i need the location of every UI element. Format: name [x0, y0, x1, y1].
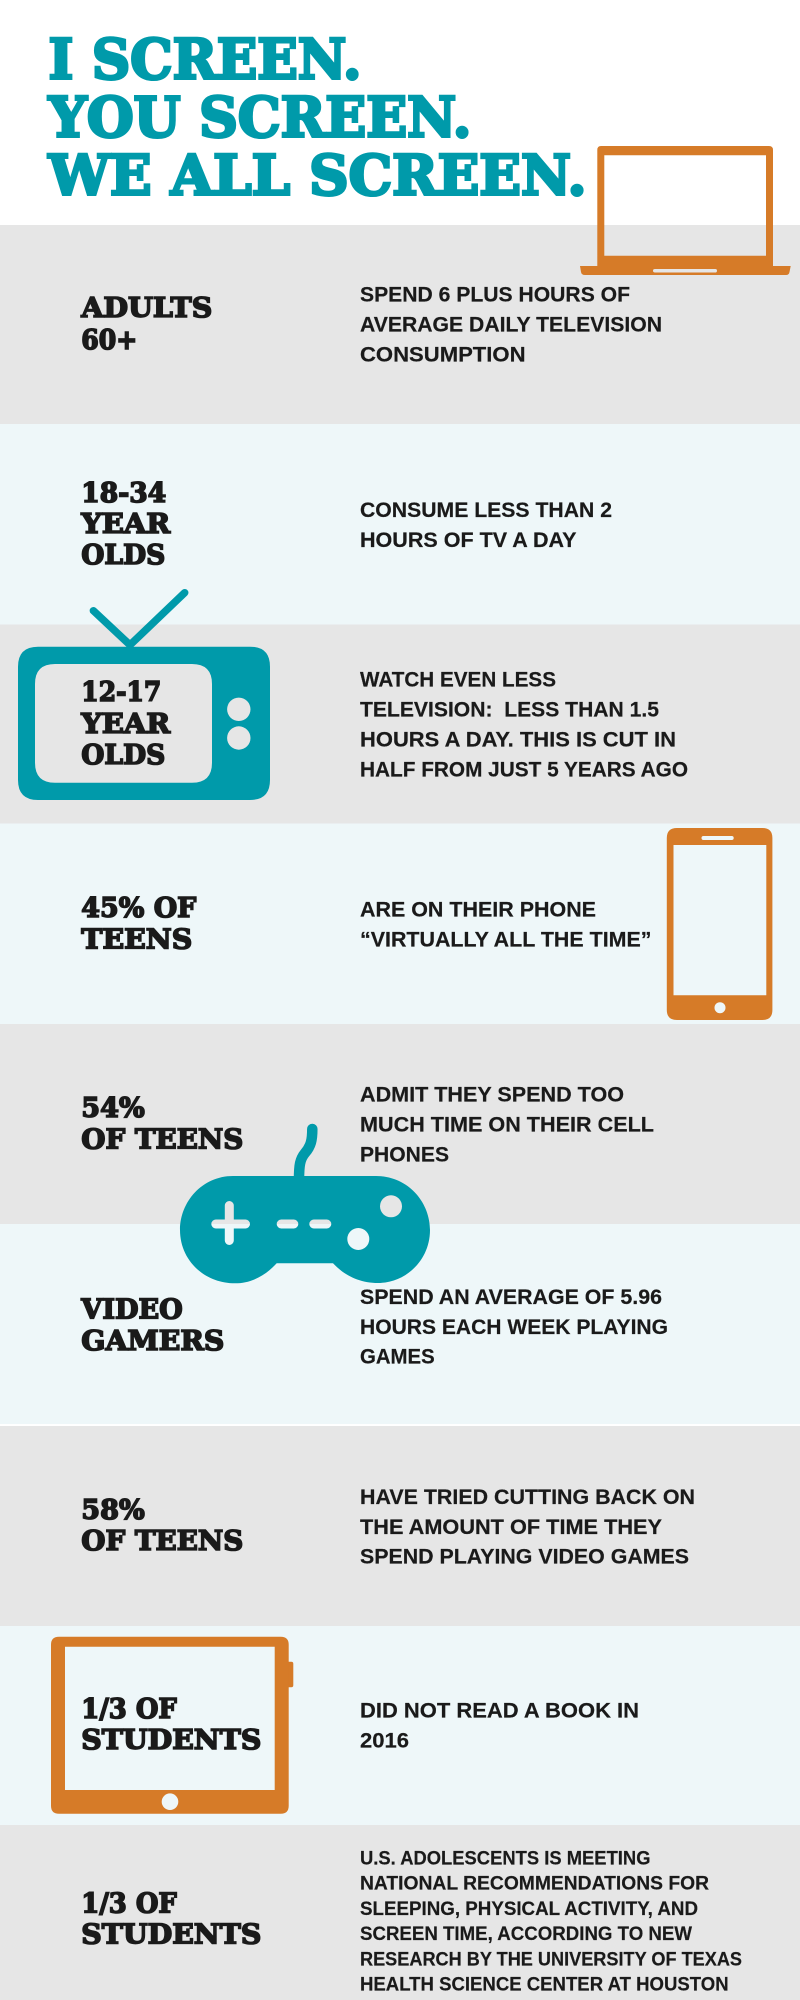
panel: adults 60+	[0, 225, 800, 424]
text: 18-34 stat	[360, 499, 612, 552]
text: recommendations stat: NATIONAL RECOMMENDATIONS FOR	[360, 1872, 709, 1894]
title: WE ALL SCREEN.	[48, 142, 587, 208]
text: books stat	[360, 1700, 639, 1753]
text: 54% stat	[360, 1084, 654, 1167]
icon: tablet	[51, 1637, 293, 1814]
title	[48, 26, 587, 208]
label: 1/3 of students: 1/3 OF	[81, 1693, 177, 1725]
label: 12-17 year olds: YEAR	[80, 708, 171, 740]
label: 18-34 year olds: 18-34	[81, 477, 166, 509]
text: 54% stat: PHONES	[360, 1144, 449, 1167]
label: video gamers: GAMERS	[81, 1325, 224, 1357]
text: recommendations stat: HEALTH SCIENCE CENTER AT HOUSTON	[360, 1973, 729, 1995]
text: recommendations stat: SLEEPING, PHYSICAL ACTIVITY, AND	[360, 1898, 698, 1920]
text: 12-17 stat: HALF FROM JUST 5 YEARS AGO	[360, 759, 688, 782]
text: 12-17 stat: WATCH EVEN LESS	[360, 669, 556, 692]
text: 58% stat: THE AMOUNT OF TIME THEY	[360, 1516, 662, 1539]
panel: 18-34 year olds	[0, 424, 800, 624]
text: video gamers stat	[360, 1286, 668, 1368]
text: adults 60+ stat	[360, 284, 662, 367]
text: 58% stat	[360, 1486, 695, 1568]
panel: 1/3 of students, recommendations	[0, 1825, 800, 2000]
panel: 45% of teens	[0, 824, 800, 1024]
text: video gamers stat: GAMES	[360, 1346, 435, 1368]
text: 12-17 stat: TELEVISION: LESS THAN 1.5	[360, 699, 659, 722]
label: 1/3 of students	[81, 1693, 261, 1756]
title: I SCREEN.	[48, 26, 362, 92]
icon: television	[18, 593, 270, 800]
label: 12-17 year olds: OLDS	[81, 739, 165, 771]
label: 58% of teens: OF TEENS	[81, 1525, 243, 1557]
label: adults 60+	[80, 292, 212, 356]
label: 45% of teens: 45% OF	[81, 892, 197, 924]
text: adults 60+ stat: CONSUMPTION	[360, 344, 526, 367]
text: 45% stat: ARE ON THEIR PHONE	[360, 899, 596, 922]
label: 58% of teens: 58%	[81, 1494, 145, 1526]
panel: 58% of teens	[0, 1426, 800, 1626]
text: video gamers stat: SPEND AN AVERAGE OF 5.96	[360, 1286, 662, 1309]
label: 18-34 year olds	[80, 477, 171, 571]
label: 12-17 year olds	[80, 676, 171, 771]
text: recommendations stat: RESEARCH BY THE UNIVERSITY OF TEXAS	[360, 1948, 742, 1970]
label: 45% of teens	[81, 892, 197, 956]
label: video gamers: VIDEO	[80, 1294, 183, 1326]
text: adults 60+ stat: AVERAGE DAILY TELEVISION	[360, 314, 662, 337]
label: 18-34 year olds: OLDS	[81, 539, 165, 571]
text: 12-17 stat	[360, 669, 688, 782]
label: 1/3 of students: STUDENTS	[81, 1724, 261, 1756]
text: adults 60+ stat: SPEND 6 PLUS HOURS OF	[360, 284, 630, 307]
title: YOU SCREEN.	[48, 84, 472, 150]
label: 45% of teens: TEENS	[81, 924, 192, 956]
text: books stat: 2016	[360, 1730, 409, 1753]
label: 1/3 of students	[81, 1888, 261, 1950]
label: 1/3 of students: STUDENTS	[81, 1918, 261, 1950]
label: 54% of teens: 54%	[81, 1092, 145, 1124]
text: 45% stat: “VIRTUALLY ALL THE TIME”	[360, 929, 652, 952]
text: recommendations stat	[360, 1847, 742, 1995]
label: 54% of teens: OF TEENS	[81, 1124, 243, 1156]
icon: game controller	[180, 1129, 430, 1283]
text: 58% stat: HAVE TRIED CUTTING BACK ON	[360, 1486, 695, 1509]
text: 54% stat: ADMIT THEY SPEND TOO	[360, 1084, 624, 1107]
text: 12-17 stat: HOURS A DAY. THIS IS CUT IN	[360, 729, 676, 752]
text: 45% stat	[360, 899, 652, 952]
text: video gamers stat: HOURS EACH WEEK PLAYING	[360, 1316, 668, 1339]
text: 18-34 stat: HOURS OF TV A DAY	[360, 529, 576, 552]
text: recommendations stat: SCREEN TIME, ACCORDING TO NEW	[360, 1923, 693, 1945]
icon: smartphone	[667, 828, 772, 1020]
panel: 54% of teens	[0, 1024, 800, 1224]
panel: video gamers	[0, 1224, 800, 1424]
label: 12-17 year olds: 12-17	[81, 676, 161, 708]
text: recommendations stat: U.S. ADOLESCENTS IS MEETING	[360, 1847, 650, 1869]
label: 1/3 of students: 1/3 OF	[81, 1888, 177, 1920]
panel: 1/3 of students, books	[0, 1626, 800, 1825]
label: adults 60+: 60+	[81, 324, 137, 356]
label: 54% of teens	[81, 1092, 243, 1156]
label: video gamers	[80, 1294, 224, 1357]
text: 54% stat: MUCH TIME ON THEIR CELL	[360, 1114, 654, 1137]
text: books stat: DID NOT READ A BOOK IN	[360, 1700, 639, 1723]
label: 18-34 year olds: YEAR	[80, 508, 171, 540]
label: 58% of teens	[81, 1494, 243, 1557]
label: adults 60+: ADULTS	[80, 292, 212, 324]
panel: 12-17 year olds	[0, 624, 800, 824]
text: 18-34 stat: CONSUME LESS THAN 2	[360, 499, 612, 522]
icon: laptop	[580, 146, 791, 275]
text: 58% stat: SPEND PLAYING VIDEO GAMES	[360, 1546, 689, 1568]
